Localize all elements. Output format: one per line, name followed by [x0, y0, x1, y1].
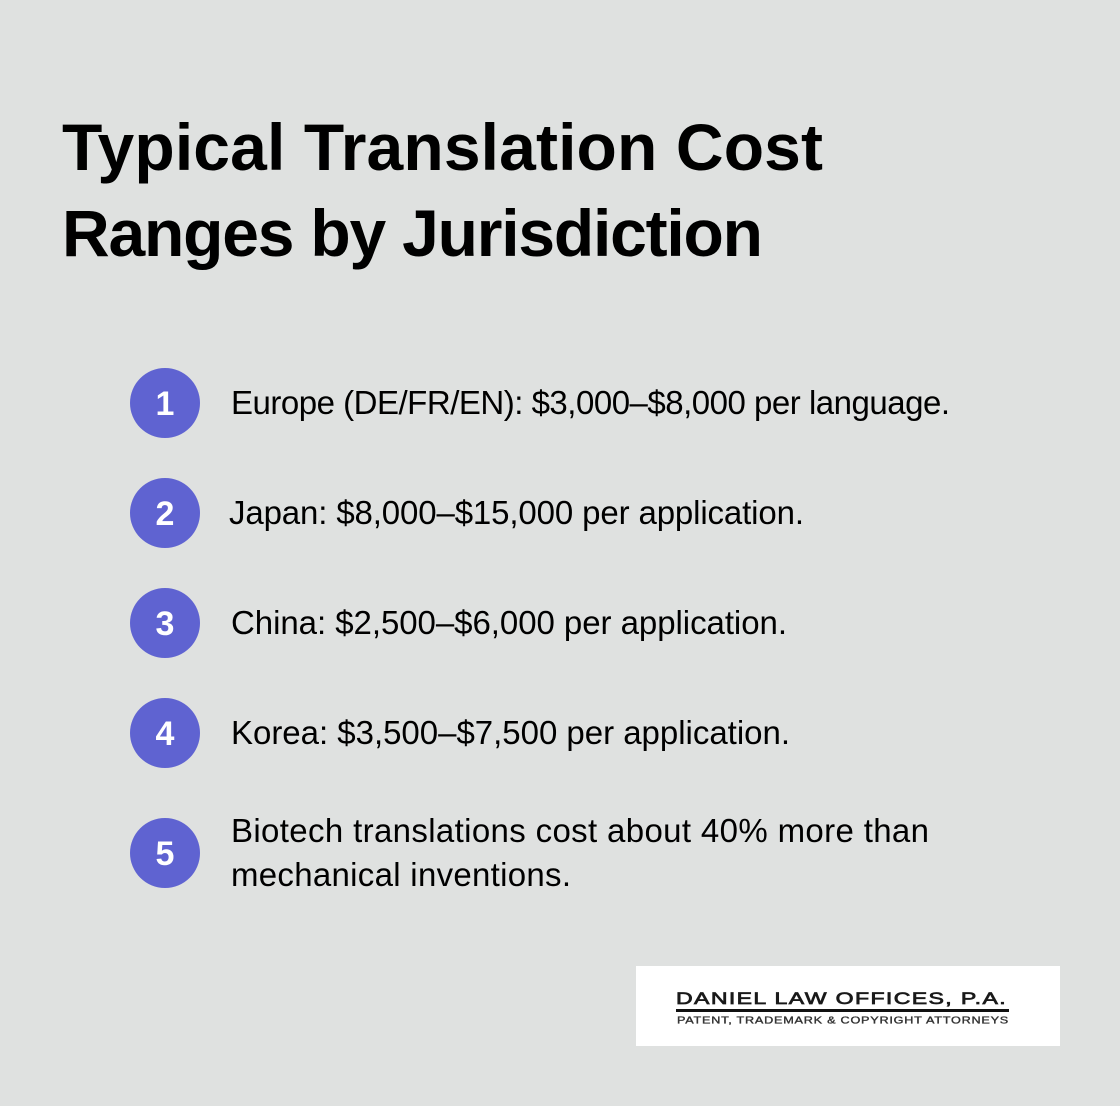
- list item 3: China: [130, 588, 787, 658]
- text: Biotech premium: Biotech translations cost about 40% more than: [231, 812, 929, 849]
- number badge 4: [130, 698, 200, 768]
- text: China cost: China: $2,500–$6,000 per application.: [231, 604, 787, 641]
- title: [62, 110, 823, 270]
- number badge 1: [130, 368, 200, 438]
- list item 2: Japan: [130, 478, 804, 548]
- title: Ranges by Jurisdiction: [62, 196, 763, 270]
- number badge 4: 4: [156, 715, 175, 753]
- list item 1: Europe: [130, 368, 950, 438]
- number badge 3: [130, 588, 200, 658]
- text: Japan cost: Japan: $8,000–$15,000 per application.: [229, 494, 804, 531]
- number badge 1: 1: [156, 385, 174, 423]
- number badge 5: [130, 818, 200, 888]
- list item 5: Biotech: [130, 812, 929, 893]
- text: Europe cost: Europe (DE/FR/EN): $3,000–$8,000 per language.: [231, 384, 950, 421]
- title: Typical Translation Cost: [62, 110, 823, 184]
- logo name: DANIEL LAW OFFICES, P.A.: [676, 989, 1007, 1008]
- logo tagline: PATENT, TRADEMARK & COPYRIGHT ATTORNEYS: [677, 1016, 1009, 1026]
- logo: Daniel Law Offices: [636, 966, 1060, 1046]
- text: Korea cost: Korea: $3,500–$7,500 per application.: [231, 714, 790, 751]
- text: Biotech premium: mechanical inventions.: [231, 856, 571, 893]
- number badge 2: [130, 478, 200, 548]
- number badge 2: 2: [156, 495, 174, 533]
- text: Biotech premium: [231, 812, 929, 893]
- list item 4: Korea: [130, 698, 790, 768]
- number badge 5: 5: [156, 835, 174, 873]
- number badge 3: 3: [156, 605, 174, 643]
